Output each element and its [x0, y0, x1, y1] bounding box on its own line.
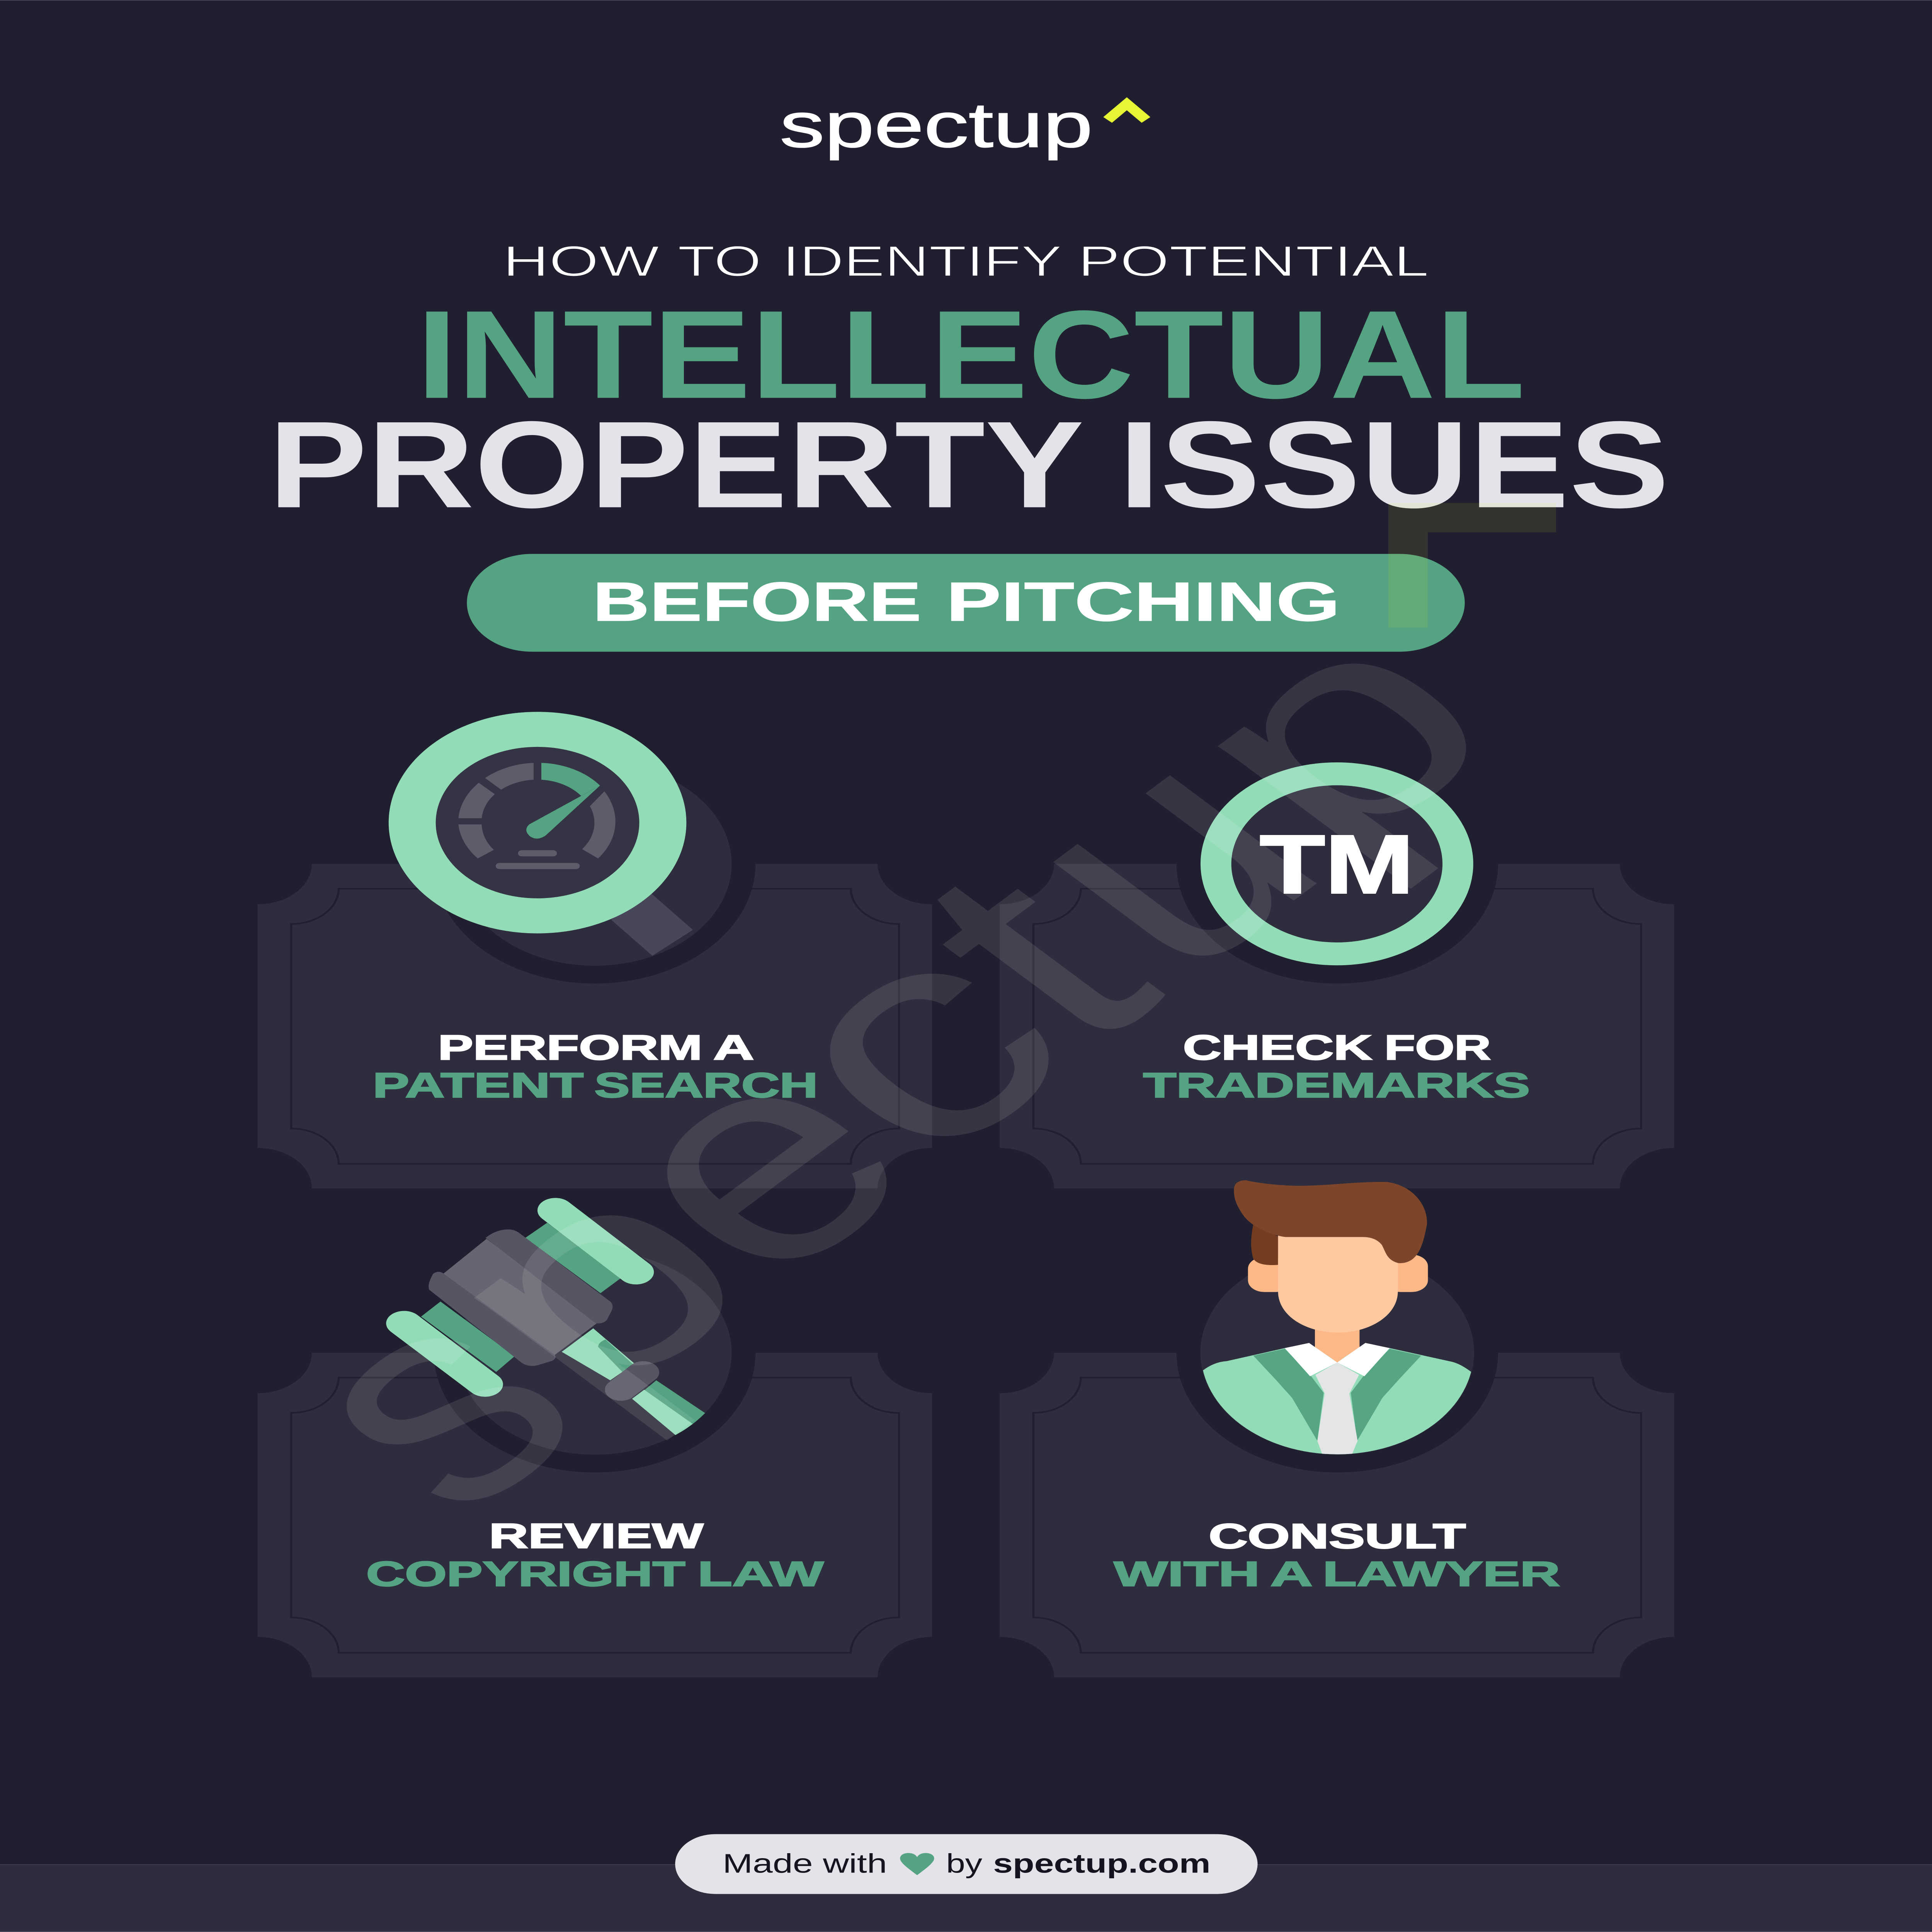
heading: check for — [1183, 1028, 1491, 1067]
watermark: spectup: t — [834, 807, 1228, 1100]
icon: lawyer avatar — [1193, 1180, 1481, 1461]
icon: trademark ring — [1216, 774, 1458, 954]
heading: trademarks: TRADEMARKS — [1143, 1066, 1530, 1105]
watermark: spectup: u — [931, 684, 1394, 1028]
heading: with a lawyer: WITH — [1114, 1554, 1260, 1594]
subtitle: how to identify potential: POTENTIAL — [1078, 237, 1429, 286]
subtitle: how to identify potential: HOW — [503, 237, 659, 286]
watermark: spectup — [207, 559, 1567, 1568]
footer band — [0, 1864, 1932, 1932]
subtitle: how to identify potential: IDENTIFY — [782, 237, 1062, 286]
footer badge: made with love by spectup.com: Made with — [723, 1848, 887, 1879]
footer badge: made with love by spectup.com: by — [946, 1848, 983, 1879]
watermark: spectup: p — [355, 1110, 823, 1458]
icon: gavel — [404, 1210, 707, 1437]
banner: before pitching: PITCHING — [946, 571, 1340, 633]
title: property issues: PROPERTY — [269, 396, 1084, 534]
subtitle: how to identify potential — [503, 237, 1429, 286]
heading: patent search: PATENT — [373, 1066, 583, 1105]
heading: check for: CHECK — [1183, 1028, 1372, 1067]
heading: patent search — [373, 1066, 818, 1105]
footer badge: made with love by spectup.com: spectup.com — [993, 1848, 1211, 1879]
heading: review: REVIEW — [489, 1516, 704, 1555]
title: property issues — [269, 396, 1669, 534]
title: intellectual: INTELLECTUAL — [417, 285, 1525, 425]
panel: review copyright law — [257, 1210, 932, 1677]
heading: with a lawyer: LAWYER — [1323, 1554, 1560, 1594]
watermark: spectup: c — [677, 868, 1145, 1216]
watermark: caret — [1388, 503, 1556, 628]
heading: perform a: PERFORM — [438, 1028, 702, 1067]
heading: with a lawyer: A — [1270, 1554, 1313, 1594]
icon: trademark ring: TM — [1260, 818, 1414, 911]
icon: heart — [900, 1853, 934, 1875]
banner: before pitching — [467, 554, 1465, 652]
watermark: spectup: p — [1099, 559, 1567, 906]
heading: consult: CONSULT — [1209, 1517, 1466, 1556]
footer badge: made with love by spectup.com — [675, 1834, 1258, 1894]
heading: check for: FOR — [1384, 1028, 1491, 1067]
panel: consult with a lawyer — [1000, 1180, 1674, 1677]
logo: spectup: spectup — [780, 90, 1093, 161]
banner: before pitching: BEFORE — [593, 571, 922, 633]
heading: with a lawyer — [1114, 1554, 1560, 1594]
heading: copyright law — [366, 1554, 824, 1594]
icon: logo caret — [1108, 104, 1146, 120]
watermark: spectup: s — [207, 1235, 655, 1568]
subtitle: how to identify potential: TO — [678, 237, 761, 286]
icon: magnifying glass with gauge — [412, 730, 693, 956]
panel: perform a patent search — [257, 730, 932, 1188]
heading: perform a: A — [713, 1028, 754, 1067]
panel: check for trademarks — [1000, 744, 1674, 1188]
heading: patent search: SEARCH — [594, 1066, 818, 1105]
watermark: spectup: e — [516, 986, 988, 1337]
heading: copyright law: LAW — [697, 1554, 824, 1594]
heading: copyright law: COPYRIGHT — [366, 1554, 685, 1594]
title: property issues: ISSUES — [1119, 396, 1669, 534]
